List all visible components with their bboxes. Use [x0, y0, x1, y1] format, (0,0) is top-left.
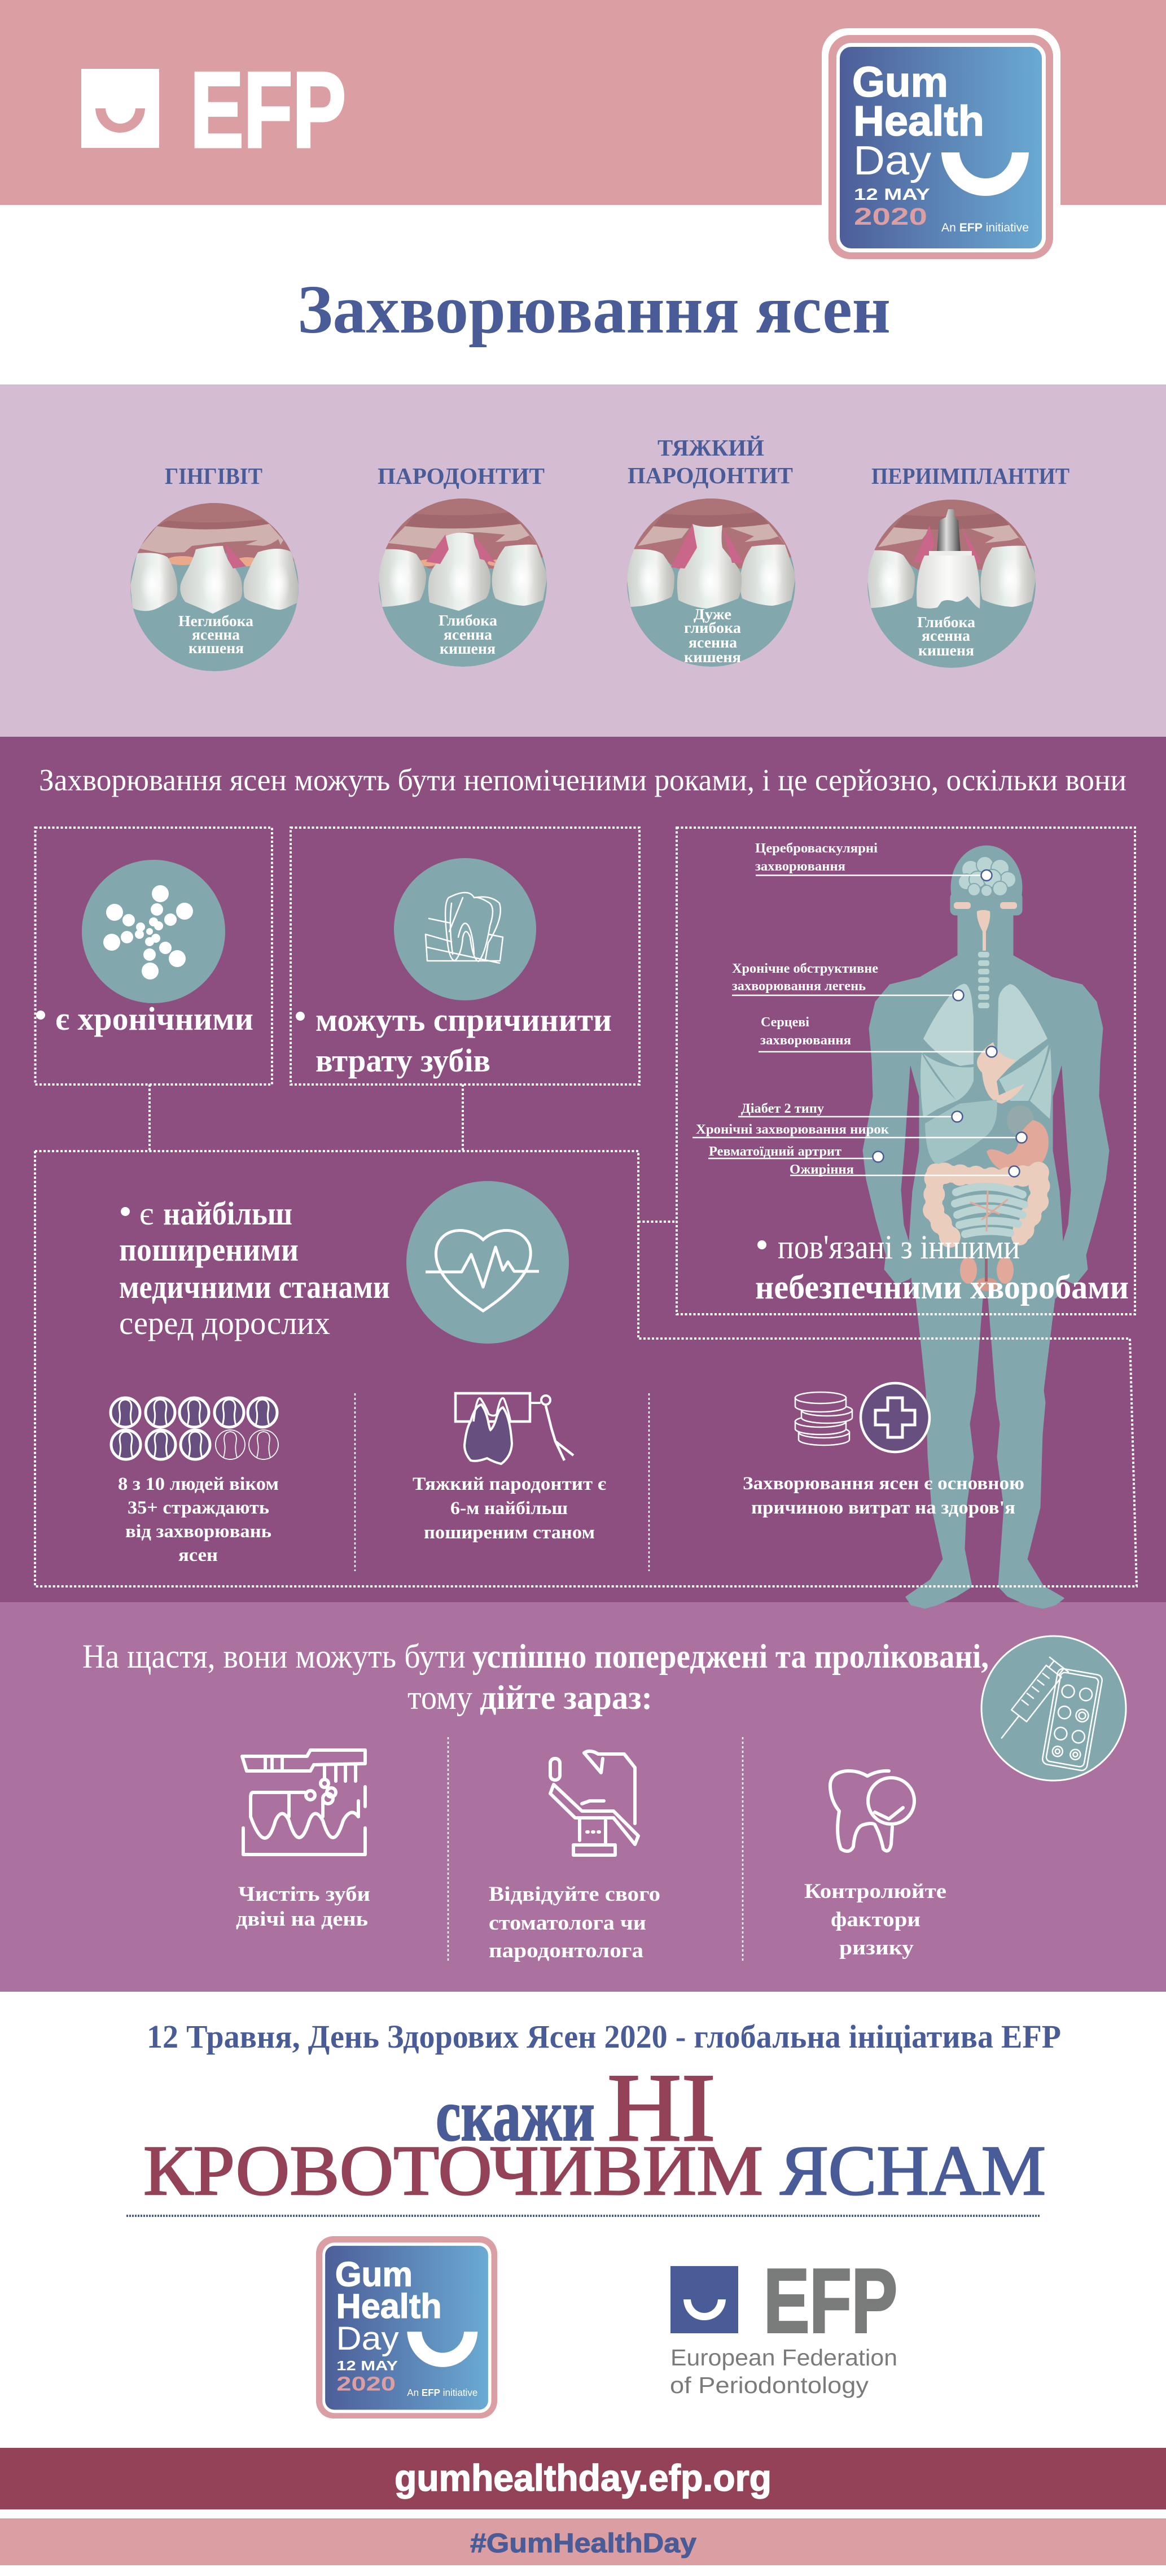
label: cerebrovascular: захворювання — [755, 859, 845, 874]
logo: EFP white — [81, 50, 346, 170]
organ: bladder and vessels — [960, 1257, 1014, 1291]
icon: tooth with probe — [455, 1393, 573, 1464]
text: linked to other serious diseases — [755, 1228, 1129, 1306]
logo: Gum Health Day badge bottom: An EFP initiative — [407, 2387, 477, 2398]
icon: tooth with magnifier — [830, 1771, 914, 1851]
icon: syringe and pills — [981, 1636, 1126, 1781]
label: heart disease — [759, 1015, 997, 1057]
illustration: gingivitis teeth — [130, 502, 299, 671]
logo: Gum Health Day badge bottom: 2020 — [336, 2373, 396, 2395]
logo: Gum Health Day badge bottom — [316, 2236, 497, 2418]
text: severe periodontitis statistic: 6-м найбільш — [450, 1498, 568, 1519]
label: chronic kidney disease — [692, 1122, 1027, 1143]
text: visit your dentist: пародонтолога — [489, 1939, 643, 1962]
panel: chronic — [35, 828, 272, 1084]
panel: linked to other diseases — [677, 828, 1135, 1314]
illustration: severe periodontitis teeth: ясенна — [689, 634, 738, 651]
logo: Gum Health Day badge — [822, 28, 1060, 259]
text: tooth loss — [296, 1001, 612, 1079]
illustration: gingivitis teeth: Неглибока — [178, 613, 254, 629]
label: type 2 diabetes — [738, 1101, 963, 1122]
illustration: gingivitis teeth: ясенна — [192, 626, 240, 643]
text: most common conditions: є — [139, 1195, 154, 1232]
label: chronic kidney disease: Хронічні захворювання нирок — [696, 1122, 889, 1137]
heading: say no to bleeding gums: НІ — [607, 2054, 716, 2162]
text: linked to other serious diseases: небезпечними хворобами — [755, 1269, 1129, 1306]
text: fortunately headline — [82, 1638, 989, 1716]
illustration: severe periodontitis teeth — [626, 498, 796, 667]
text: campaign line: 12 Травня, День Здорових Ясен 2020 - глобальна ініціатива EFP — [147, 2018, 1061, 2055]
panel: act now — [0, 1602, 1166, 1992]
text: 8 of 10 statistic — [118, 1474, 279, 1565]
illustration: peri-implantitis teeth: ясенна — [922, 627, 971, 644]
illustration: severe periodontitis teeth: Дуже — [694, 606, 731, 623]
divider — [448, 1737, 449, 1963]
icon: coins — [795, 1392, 852, 1445]
organ: liver — [925, 1100, 997, 1165]
illustration: periodontitis teeth: кишеня — [440, 640, 496, 657]
panel: website bar: gumhealthday.efp.org — [394, 2457, 772, 2499]
panel: header band — [0, 0, 1166, 259]
logo: EFP with full name: of Periodontology — [670, 2372, 869, 2398]
logo: Gum Health Day badge bottom: Gum — [335, 2255, 413, 2294]
text: fortunately headline: тому — [407, 1679, 472, 1716]
illustration: severe periodontitis teeth: глибока — [684, 619, 742, 636]
logo: Gum Health Day badge bottom: Day — [336, 2320, 400, 2357]
text: most common conditions: медичними станами — [119, 1269, 390, 1305]
text: health costs statistic — [743, 1473, 1024, 1518]
text: health costs statistic: Захворювання ясен є основною — [743, 1473, 1024, 1494]
logo: EFP with full name: EFP — [764, 2250, 897, 2352]
panel: types of gum disease — [0, 384, 1166, 737]
text: brush twice a day — [236, 1883, 370, 1931]
heading: peri-implantitis: ПЕРИІМПЛАНТИТ — [871, 463, 1069, 489]
heading: say no to bleeding gums — [143, 2054, 1046, 2210]
text: 8 of 10 statistic: 8 з 10 людей віком — [118, 1474, 279, 1494]
text: visit your dentist — [489, 1883, 660, 1962]
organ: heart — [977, 1042, 1024, 1104]
text: control risk factors — [804, 1880, 946, 1960]
label: COPD: Хронічне обструктивне — [732, 961, 878, 976]
text: control risk factors: Контролюйте — [804, 1880, 946, 1903]
heading: say no to bleeding gums: КРОВОТОЧИВИМ — [143, 2132, 763, 2210]
text: linked to other serious diseases: пов'язані з іншими — [778, 1228, 1020, 1266]
icon: tooth in gum — [394, 858, 536, 1000]
label: cerebrovascular: Цереброваскулярні — [755, 841, 878, 856]
text: 8 of 10 statistic: 35+ страждають — [128, 1498, 269, 1518]
text: visit your dentist: Відвідуйте свого — [489, 1883, 660, 1906]
heading: severe periodontitis: ПАРОДОНТИТ — [628, 462, 793, 488]
text: brush twice a day: Чистіть зуби — [238, 1883, 370, 1906]
heading: say no to bleeding gums: скажи — [436, 2074, 595, 2157]
logo: Gum Health Day badge: Health — [853, 97, 984, 145]
organ: throat and windpipe — [954, 902, 1017, 951]
text: chronic: є хронічними — [55, 1000, 253, 1037]
text: most common conditions: найбільш — [163, 1195, 292, 1232]
text: tooth loss: можуть спричинити — [315, 1001, 612, 1038]
icon: bacteria — [82, 860, 225, 1003]
text: 8 of 10 statistic: ясен — [178, 1545, 218, 1565]
logo: Gum Health Day badge: 2020 — [854, 203, 927, 230]
illustration: periodontitis teeth: ясенна — [444, 626, 493, 643]
icon: toothbrush and teeth — [242, 1750, 365, 1855]
text: severe periodontitis statistic — [413, 1474, 606, 1543]
label: heart disease: захворювання — [760, 1033, 851, 1048]
text: fortunately headline: дійте зараз: — [480, 1679, 652, 1716]
organ: intestines — [933, 1172, 1040, 1237]
label: COPD: захворювання легень — [732, 979, 866, 994]
divider — [742, 1737, 743, 1963]
logo: Gum Health Day badge: Day — [853, 138, 931, 183]
panel: tooth loss — [291, 828, 639, 1084]
label: obesity — [790, 1162, 1019, 1177]
text: control risk factors: фактори — [831, 1908, 920, 1931]
text: fortunately headline: На щастя, вони можуть бути — [82, 1638, 466, 1675]
logo: EFP with full name — [670, 2250, 897, 2398]
icon: 8 of 10 people — [111, 1398, 278, 1459]
text: severe periodontitis statistic: Тяжкий пародонтит є — [413, 1474, 606, 1494]
label: type 2 diabetes: Діабет 2 типу — [741, 1101, 824, 1116]
heading: periodontitis: ПАРОДОНТИТ — [378, 463, 545, 489]
text: tooth loss: втрату зубів — [315, 1042, 490, 1079]
text: most common conditions: поширеними — [119, 1231, 299, 1268]
text: most common conditions: серед дорослих — [119, 1305, 330, 1341]
organ: lungs — [920, 984, 1051, 1119]
logo: EFP with full name: European Federation — [670, 2345, 897, 2371]
panel: hashtag bar — [0, 2518, 1166, 2565]
label: rheumatoid arthritis — [708, 1144, 884, 1162]
logo: Gum Health Day badge bottom: 12 MAY — [336, 2358, 398, 2373]
text: fortunately headline: успішно попереджені та проліковані, — [472, 1638, 989, 1675]
panel: website bar — [0, 2448, 1166, 2509]
illustration: peri-implantitis teeth: кишеня — [918, 642, 974, 659]
heading: say no to bleeding gums: ЯСНАМ — [780, 2132, 1046, 2210]
text: visit your dentist: стоматолога чи — [489, 1912, 646, 1935]
label: rheumatoid arthritis: Ревматоїдний артрит — [709, 1144, 841, 1159]
heading: severe periodontitis: ТЯЖКИЙ — [657, 435, 764, 461]
title: Захворювання ясен — [297, 272, 891, 348]
logo: Gum Health Day badge: 12 MAY — [854, 186, 930, 204]
illustration: peri-implantitis teeth — [867, 499, 1036, 668]
illustration: gingivitis teeth: кишеня — [189, 640, 244, 657]
logo: EFP white: EFP — [190, 50, 346, 170]
organ: spleen — [1007, 1105, 1034, 1136]
logo: Gum Health Day badge: Gum — [852, 58, 948, 106]
panel: most common conditions — [35, 1151, 1137, 1586]
illustration: periodontitis teeth — [378, 498, 547, 667]
divider — [648, 1393, 650, 1571]
icon: medical cross — [861, 1383, 930, 1452]
icon: dental chair — [550, 1751, 638, 1855]
arrow: connectors between panels — [150, 1084, 677, 1222]
illustration: severe periodontitis teeth: кишеня — [684, 649, 741, 666]
illustration: human body — [863, 846, 1108, 1608]
divider — [354, 1393, 356, 1571]
label: cerebrovascular — [755, 841, 992, 881]
label: COPD — [732, 961, 964, 1000]
heading: severe periodontitis — [628, 435, 793, 488]
text: 8 of 10 statistic: від захворювань — [125, 1521, 271, 1542]
label: obesity: Ожиріння — [790, 1162, 854, 1177]
text: severe periodontitis statistic: поширеним станом — [424, 1523, 595, 1543]
panel: gum disease consequences — [0, 737, 1166, 1608]
heading: gingivitis: ГІНГІВІТ — [165, 463, 262, 489]
illustration: peri-implantitis teeth: Глибока — [917, 614, 976, 631]
logo: Gum Health Day badge: An EFP initiative — [941, 221, 1029, 234]
label: heart disease: Серцеві — [761, 1015, 809, 1030]
text: health costs statistic: причиною витрат на здоров'я — [751, 1498, 1015, 1518]
text: control risk factors: ризику — [839, 1936, 914, 1960]
organ: stomach — [987, 1120, 1049, 1175]
logo: Gum Health Day badge bottom: Health — [336, 2287, 442, 2325]
organ: brain — [958, 856, 1016, 896]
icon: heart with pulse — [406, 1181, 569, 1344]
text: brush twice a day: двічі на день — [236, 1908, 368, 1931]
text: intro sentence: Захворювання ясен можуть бути непоміченими роками, і це серйозно, оскільки вони — [39, 763, 1126, 797]
panel: hashtag bar: #GumHealthDay — [470, 2529, 696, 2558]
text: most common conditions — [119, 1195, 390, 1341]
illustration: periodontitis teeth: Глибока — [439, 612, 498, 629]
